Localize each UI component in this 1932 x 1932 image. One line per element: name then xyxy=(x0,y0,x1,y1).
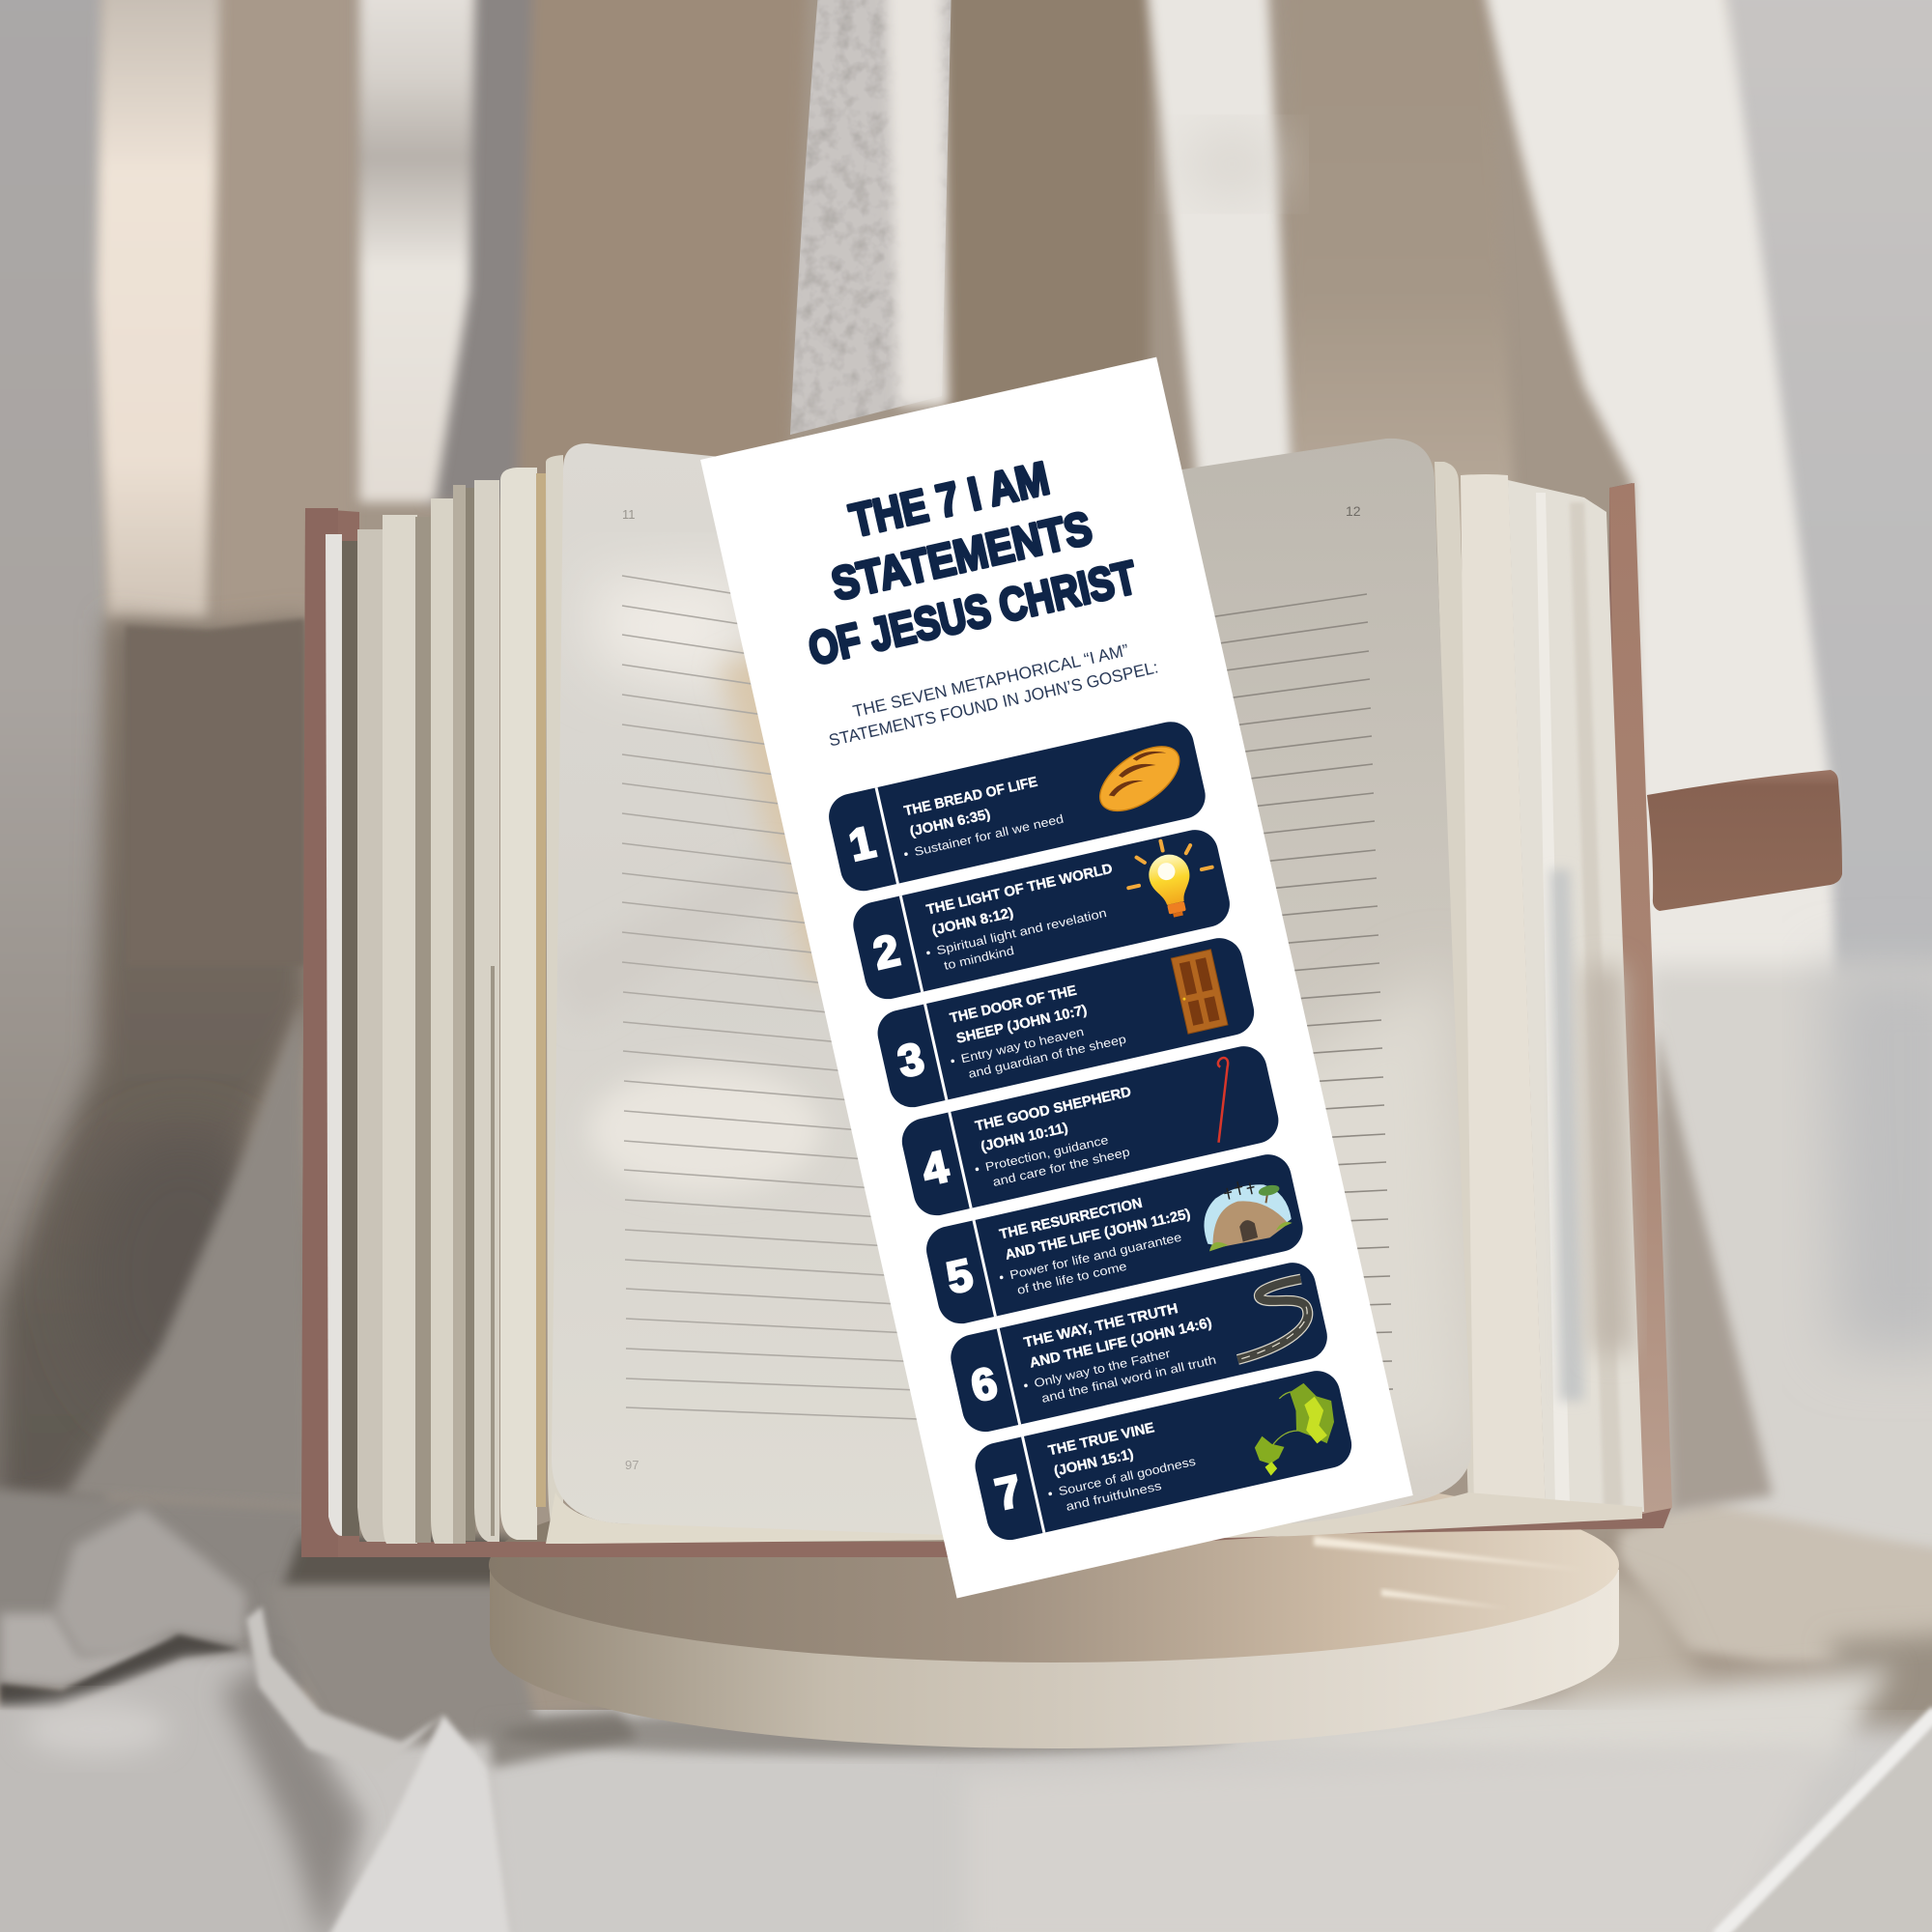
row 3: the door of the sheep: Entry way to heaven xyxy=(959,1025,1085,1065)
row 6: the way, the truth and the life: AND THE LIFE (JOHN 14:6) xyxy=(1028,1316,1213,1372)
row 2: the light of the world xyxy=(849,826,1235,1004)
row 6: the way, the truth and the life: 6 xyxy=(966,1357,1002,1411)
row 1: the bread of life xyxy=(824,718,1209,895)
row 7: the true vine xyxy=(971,1366,1356,1545)
page number top left: 11 xyxy=(622,507,636,522)
right page xyxy=(1182,439,1467,1519)
row 1: the bread of life: 1 xyxy=(844,816,880,870)
row 7: the true vine: Source of all goodness xyxy=(1057,1455,1197,1498)
row 5: the resurrection and the life: of the life to come xyxy=(1016,1260,1128,1297)
left page xyxy=(552,443,976,1536)
row 1: the bread of life: (JOHN 6:35) xyxy=(908,807,992,840)
page number bottom left: 97 xyxy=(625,1458,639,1472)
row 2: the light of the world: (JOHN 8:12) xyxy=(930,905,1015,939)
icon: winding road xyxy=(1224,1279,1315,1359)
title: OF JESUS CHRIST xyxy=(804,553,1142,675)
row 3: the door of the sheep xyxy=(873,933,1259,1112)
icon: bread loaf xyxy=(1089,734,1190,824)
row 2: the light of the world: THE LIGHT OF THE WORLD xyxy=(925,862,1114,919)
row 5: the resurrection and the life: 5 xyxy=(942,1249,978,1303)
row 2: the light of the world: Spiritual light and revelation xyxy=(935,906,1108,957)
icon: grape vine xyxy=(1243,1378,1345,1478)
row 4: the good shepherd: 4 xyxy=(918,1141,953,1195)
row 7: the true vine: 7 xyxy=(991,1465,1026,1520)
right page stack xyxy=(966,462,1644,1546)
subtitle: STATEMENTS FOUND IN JOHN’S GOSPEL: xyxy=(827,657,1160,751)
row 2: the light of the world: to mindkind xyxy=(943,944,1015,973)
page number top right: 12 xyxy=(1346,503,1361,519)
row 6: the way, the truth and the life: and the final word in all truth xyxy=(1040,1353,1217,1406)
row 3: the door of the sheep: SHEEP (JOHN 10:7) xyxy=(955,1003,1089,1047)
icon: light bulb xyxy=(1120,832,1221,925)
clasp strap xyxy=(1647,770,1842,911)
icon: empty tomb xyxy=(1195,1172,1294,1252)
row 5: the resurrection and the life xyxy=(922,1150,1307,1328)
book cover xyxy=(301,483,1672,1557)
title: THE 7 I AM xyxy=(845,453,1054,548)
row 7: the true vine: and fruitfulness xyxy=(1065,1479,1163,1514)
background: sheets and folds xyxy=(0,1003,1932,1932)
row 3: the door of the sheep: 3 xyxy=(894,1033,928,1087)
title: STATEMENTS xyxy=(827,502,1096,611)
row 1: the bread of life: THE BREAD OF LIFE xyxy=(903,775,1039,819)
card background xyxy=(700,357,1413,1598)
subtitle: THE SEVEN METAPHORICAL “I AM” xyxy=(851,640,1130,721)
row 4: the good shepherd: Protection, guidance xyxy=(984,1133,1110,1174)
row 4: the good shepherd xyxy=(897,1041,1283,1220)
row 5: the resurrection and the life: AND THE LIFE (JOHN 11:25) xyxy=(1004,1207,1192,1264)
left page stack xyxy=(326,455,966,1544)
row 3: the door of the sheep: THE DOOR OF THE xyxy=(949,983,1078,1027)
row 5: the resurrection and the life: Power for life and guarantee xyxy=(1009,1231,1183,1282)
wooden book stand xyxy=(489,1467,1619,1748)
row 5: the resurrection and the life: THE RESURRECTION xyxy=(998,1196,1144,1242)
open journal xyxy=(301,439,1842,1557)
row 6: the way, the truth and the life xyxy=(947,1258,1332,1436)
row 2: the light of the world: 2 xyxy=(868,924,904,979)
title xyxy=(779,439,1142,675)
icon: shepherd staff xyxy=(1201,1057,1244,1143)
row 7: the true vine: THE TRUE VINE xyxy=(1047,1420,1156,1459)
row 7: the true vine: (JOHN 15:1) xyxy=(1053,1447,1135,1480)
row 4: the good shepherd: (JOHN 10:11) xyxy=(980,1121,1069,1155)
row 4: the good shepherd: and care for the sheep xyxy=(991,1145,1131,1189)
row 6: the way, the truth and the life: Only way to the Father xyxy=(1033,1347,1172,1390)
bookmark card xyxy=(700,357,1413,1598)
row 4: the good shepherd: THE GOOD SHEPHERD xyxy=(974,1085,1133,1134)
row 3: the door of the sheep: and guardian of the sheep xyxy=(967,1033,1127,1081)
row 1: the bread of life: Sustainer for all we need xyxy=(913,812,1065,859)
row 6: the way, the truth and the life: THE WAY, THE TRUTH xyxy=(1023,1301,1179,1350)
icon: wooden door xyxy=(1171,950,1228,1034)
